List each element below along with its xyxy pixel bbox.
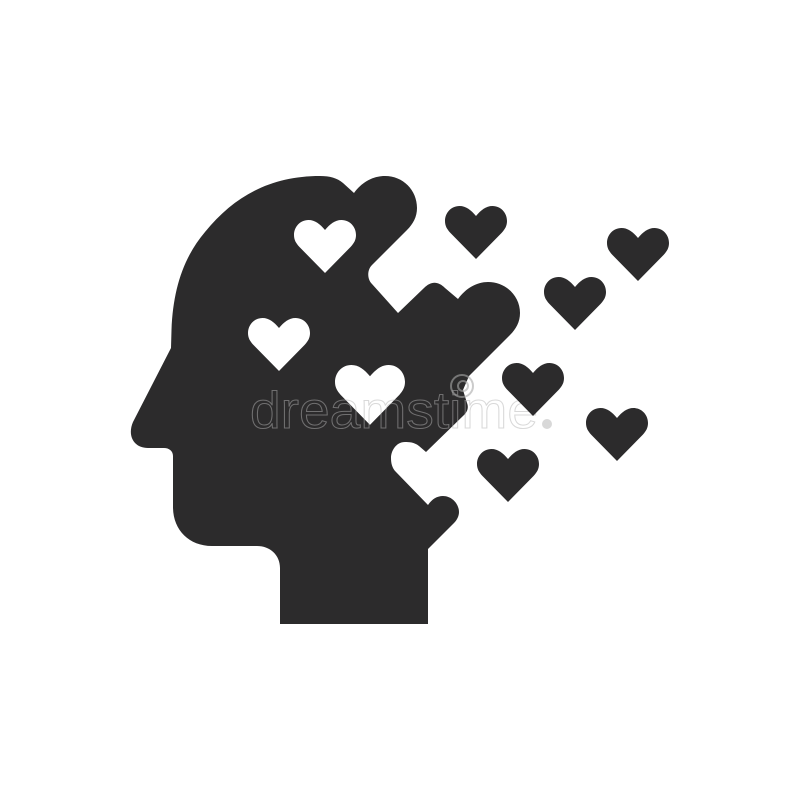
icon: floating heart 1 <box>445 206 507 259</box>
icon: white heart top of head <box>294 220 356 273</box>
watermark: dreamstime: dreamstime <box>250 382 538 440</box>
icon: floating heart 3 <box>544 277 606 330</box>
icon: floating heart 6 <box>477 449 539 502</box>
icon: floating heart 4 <box>502 363 564 416</box>
icon: white heart left of head <box>248 318 310 371</box>
icon: floating heart 2 <box>607 228 669 281</box>
icon: floating heart 5 <box>586 408 648 461</box>
icon: large white heart centre of head <box>335 365 405 425</box>
icon: watermark registered dot <box>542 419 552 429</box>
icon: head silhouette <box>131 176 520 624</box>
icon: watermark spiral <box>451 375 473 397</box>
